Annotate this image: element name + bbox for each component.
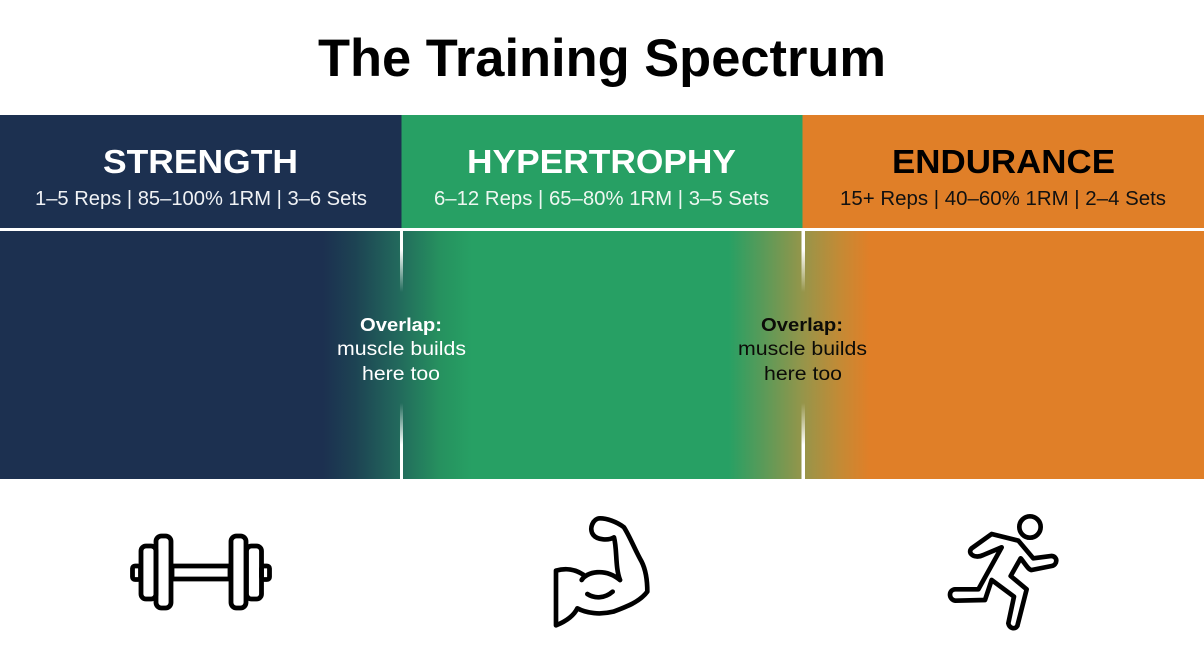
panel: spectrum gradient band [0,231,1204,479]
panel: hypertrophy header [402,115,802,228]
panel: endurance header [802,115,1204,228]
callout: hypertrophy and endurance overlap: Overlap: [761,315,843,335]
icon: dumbbell [132,536,270,608]
callout: hypertrophy and endurance overlap [738,315,867,385]
icon: flexed bicep [556,518,647,625]
heading: strength: STRENGTH [103,143,298,180]
callout: hypertrophy and endurance overlap: muscle builds [738,339,867,360]
heading: endurance: ENDURANCE [892,143,1115,180]
panel: strength header [0,115,402,228]
icon: runner [950,516,1056,628]
text: endurance parameters: 15+ Reps | 40–60% 1RM | 2–4 Sets [840,188,1166,210]
callout: strength and hypertrophy overlap [337,315,466,385]
text: hypertrophy parameters: 6–12 Reps | 65–80% 1RM | 3–5 Sets [434,188,769,210]
callout: hypertrophy and endurance overlap: here too [764,364,842,385]
callout: strength and hypertrophy overlap: here too [362,364,440,385]
callout: strength and hypertrophy overlap: muscle builds [337,339,466,360]
heading: hypertrophy: HYPERTROPHY [467,143,736,180]
callout: strength and hypertrophy overlap: Overlap: [360,315,442,335]
text: strength parameters: 1–5 Reps | 85–100% 1RM | 3–6 Sets [35,188,367,210]
title: The Training Spectrum [318,29,886,88]
